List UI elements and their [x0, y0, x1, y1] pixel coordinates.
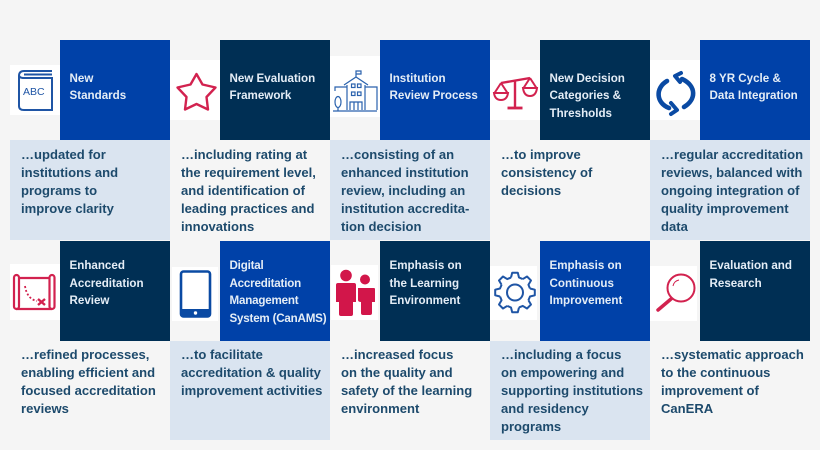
description	[490, 341, 650, 440]
description	[21, 347, 156, 416]
description: institution accredita-	[341, 201, 469, 216]
description	[501, 147, 592, 198]
heading: System (CanAMS)	[230, 312, 326, 324]
icon: map	[10, 264, 60, 320]
description: …including a focus	[501, 347, 621, 362]
description: consistency of	[501, 165, 592, 180]
description: enhanced institution	[341, 165, 469, 180]
icon: gear	[490, 266, 537, 320]
description: …to facilitate	[181, 347, 263, 362]
icon: cycle arrows	[650, 60, 700, 120]
icon: institution building	[330, 56, 380, 117]
description: …regular accreditation	[661, 147, 803, 162]
icon: book	[10, 65, 60, 115]
heading: Thresholds	[550, 106, 612, 120]
icon: magnifier	[650, 266, 697, 321]
heading: Emphasis on	[390, 259, 462, 272]
description: ongoing integration of	[661, 183, 799, 198]
card: Evaluation and Research	[650, 241, 810, 416]
heading: Accreditation	[70, 276, 144, 290]
description	[341, 347, 472, 416]
description: to the continuous	[661, 365, 770, 380]
description: improvement of	[661, 383, 759, 398]
heading: Enhanced	[70, 259, 125, 272]
heading: Review Process	[390, 89, 478, 102]
icon: people	[331, 265, 378, 320]
heading: Categories &	[550, 89, 621, 102]
heading	[700, 40, 810, 140]
heading: Improvement	[550, 294, 622, 307]
description	[10, 140, 170, 240]
description: and residency	[501, 401, 589, 416]
description: reviews	[21, 401, 69, 416]
heading: New Decision	[550, 72, 625, 84]
description: …refined processes,	[21, 347, 149, 362]
description: tion decision	[341, 219, 421, 234]
description	[170, 341, 330, 440]
heading: the Learning	[390, 276, 459, 290]
card: New Evaluation Framework	[170, 40, 330, 234]
heading: New	[70, 72, 93, 84]
heading: Data Integration	[710, 89, 798, 102]
description: innovations	[181, 219, 254, 234]
heading: Framework	[230, 89, 291, 102]
description: decisions	[501, 183, 561, 198]
heading	[220, 40, 330, 140]
description: …systematic approach	[661, 347, 804, 362]
heading	[540, 40, 650, 140]
heading: 8 YR Cycle &	[710, 72, 781, 84]
card: Institution Review Process	[330, 40, 490, 240]
heading: Accreditation	[230, 276, 301, 290]
heading	[540, 241, 650, 341]
description: on the quality and	[341, 365, 453, 380]
description	[661, 347, 804, 416]
heading: Research	[710, 276, 762, 290]
card: Digital Accreditation Management System	[170, 241, 330, 440]
card: Emphasis on Continuous Improvement	[490, 241, 650, 440]
heading: Management	[230, 294, 298, 307]
description: the requirement level,	[181, 165, 316, 180]
description: improve clarity	[21, 201, 114, 216]
description	[181, 147, 316, 234]
heading: Evaluation and	[710, 259, 792, 272]
heading: Institution	[390, 72, 446, 84]
description: leading practices and	[181, 201, 314, 216]
description: …updated for	[21, 147, 106, 162]
description	[650, 140, 810, 240]
description	[330, 140, 490, 240]
description: and identification of	[181, 183, 305, 198]
card: 8 YR Cycle & Data Integration	[650, 40, 810, 240]
heading	[380, 40, 490, 140]
heading: Standards	[70, 89, 126, 102]
description: institutions and	[21, 165, 118, 180]
heading: New Evaluation	[230, 72, 315, 84]
card: Enhanced Accreditation Review	[10, 241, 170, 416]
heading	[220, 241, 330, 341]
icon: star	[170, 60, 220, 120]
heading	[380, 241, 490, 341]
card: New Decision Categories & Thresholds	[490, 40, 650, 198]
icon: tablet	[172, 267, 218, 321]
description: safety of the learning	[341, 383, 472, 398]
description: review, including an	[341, 183, 465, 198]
heading: Continuous	[550, 276, 614, 290]
icon: scales	[490, 60, 540, 120]
heading: Environment	[390, 294, 460, 307]
heading	[700, 241, 810, 341]
heading: Emphasis on	[550, 259, 622, 272]
description: supporting institutions	[501, 383, 643, 398]
description: focused accreditation	[21, 383, 156, 398]
description: reviews, balanced with	[661, 165, 802, 180]
description: programs to	[21, 183, 97, 198]
description: …increased focus	[341, 347, 453, 362]
card: New Standards	[10, 40, 170, 240]
heading: Digital	[230, 259, 264, 272]
description: quality improvement	[661, 201, 789, 216]
description: data	[661, 219, 688, 234]
heading	[60, 241, 170, 341]
card: Emphasis on the Learning Environment	[331, 241, 490, 416]
description: CanERA	[661, 401, 713, 416]
description: improvement activities	[181, 383, 322, 398]
description: on empowering and	[501, 365, 624, 380]
description: enabling efficient and	[21, 365, 155, 380]
heading: Review	[70, 294, 109, 307]
description: environment	[341, 401, 419, 416]
heading	[60, 40, 170, 140]
description: …consisting of an	[341, 147, 454, 162]
description: programs	[501, 419, 561, 434]
icon: book: ABC	[23, 86, 45, 98]
description: …including rating at	[181, 147, 307, 162]
description: accreditation & quality	[181, 365, 321, 380]
description: …to improve	[501, 147, 581, 162]
